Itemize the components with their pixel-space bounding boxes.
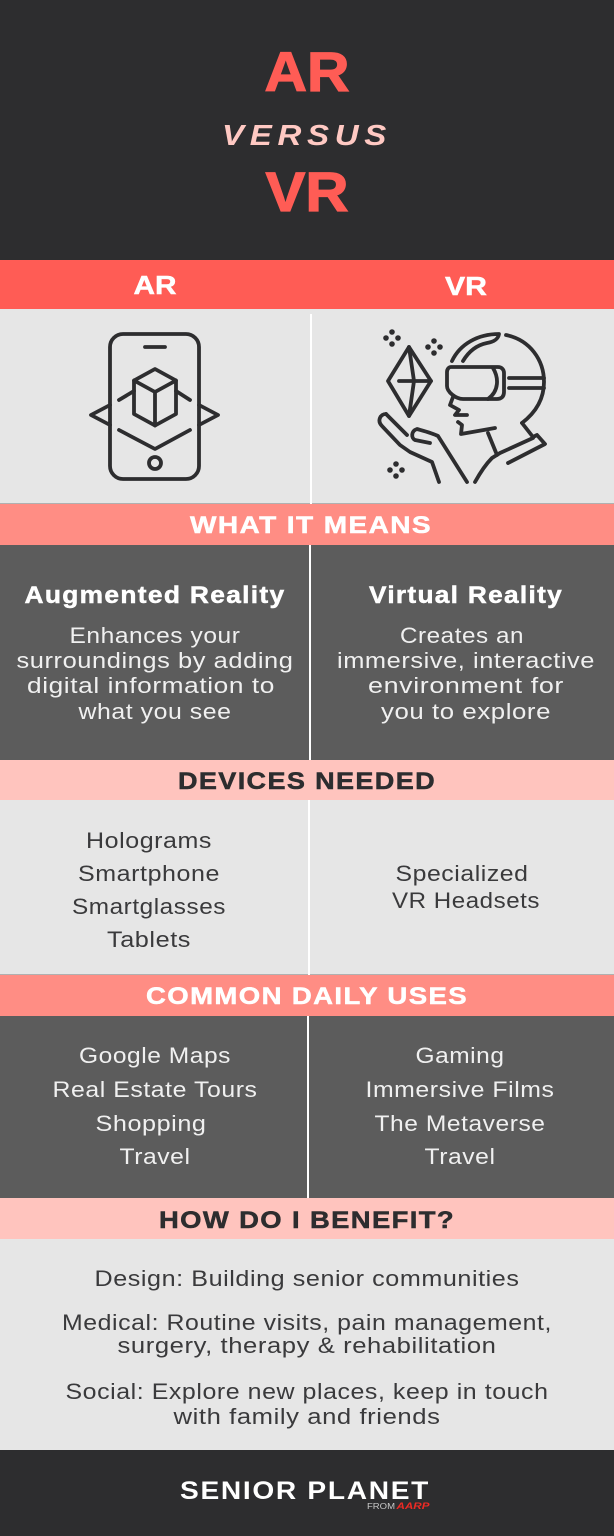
text block: benefits list: with family and friends xyxy=(172,1404,441,1429)
title: AR xyxy=(264,40,350,103)
text block: AR devices: Tablets xyxy=(107,927,191,952)
title: VERSUS xyxy=(222,120,392,152)
heading: devices needed: DEVICES NEEDED xyxy=(178,768,436,795)
text block: benefits list: Medical: Routine visits, pain management, xyxy=(62,1310,552,1335)
text block: augmented reality: Augmented Reality xyxy=(24,582,286,609)
panel: column headers xyxy=(0,260,614,309)
text block: AR uses: Travel xyxy=(120,1144,190,1169)
heading: what it means xyxy=(0,504,614,545)
text block: VR devices xyxy=(392,861,540,913)
title xyxy=(222,40,392,223)
text block: AR uses: Shopping xyxy=(96,1111,206,1136)
text block: VR uses: Travel xyxy=(424,1144,496,1169)
text block: AR uses: Real Estate Tours xyxy=(52,1077,258,1102)
text block: AR uses xyxy=(52,1043,258,1169)
text block: VR devices: Specialized xyxy=(396,861,528,886)
logo: Senior Planet from AARP: SENIOR PLANET xyxy=(180,1477,430,1505)
text block: AR devices xyxy=(72,828,226,952)
heading: how do I benefit xyxy=(0,1198,614,1239)
text block: augmented reality: digital information to xyxy=(27,673,275,698)
heading: common daily uses xyxy=(0,975,614,1016)
heading: common daily uses: COMMON DAILY USES xyxy=(146,983,468,1010)
text block: augmented reality: what you see xyxy=(77,699,231,724)
heading: devices needed xyxy=(0,760,614,800)
text block: AR devices: Smartglasses xyxy=(72,894,226,919)
text block: augmented reality: Enhances your xyxy=(70,623,240,648)
text block: augmented reality: surroundings by adding xyxy=(16,648,294,673)
heading: how do I benefit: HOW DO I BENEFIT? xyxy=(159,1207,455,1234)
panel: column headers: AR xyxy=(134,270,177,300)
text block: VR uses xyxy=(366,1043,554,1169)
text block: virtual reality: Virtual Reality xyxy=(369,582,563,609)
panel: column headers: VR xyxy=(445,271,487,301)
text block: virtual reality: you to explore xyxy=(381,699,551,724)
panel: benefits xyxy=(0,1239,614,1450)
text block: benefits list: surgery, therapy & rehabilitation xyxy=(118,1333,496,1358)
text block: AR devices: Smartphone xyxy=(78,861,220,886)
icon: VR headset user xyxy=(379,334,545,482)
text block: VR uses: Immersive Films xyxy=(366,1077,554,1102)
panel: devices xyxy=(0,800,614,975)
title: VR xyxy=(266,160,348,223)
text block: benefits list xyxy=(62,1266,552,1429)
text block: virtual reality xyxy=(337,582,595,724)
text block: AR devices: Holograms xyxy=(86,828,212,853)
text block: VR uses: The Metaverse xyxy=(374,1111,546,1136)
text block: virtual reality: environment for xyxy=(368,673,564,698)
text block: AR uses: Google Maps xyxy=(79,1043,231,1068)
icon: AR smartphone with cube xyxy=(91,334,218,479)
text block: VR devices: VR Headsets xyxy=(392,888,540,913)
panel: icons xyxy=(0,309,614,504)
panel: uses xyxy=(0,1016,614,1198)
text block: benefits list: Social: Explore new places, keep in touch xyxy=(66,1379,548,1404)
text block: virtual reality: Creates an xyxy=(400,623,524,648)
text block: virtual reality: immersive, interactive xyxy=(337,648,595,673)
text block: augmented reality xyxy=(16,582,294,724)
text block: VR uses: Gaming xyxy=(416,1043,504,1068)
logo: Senior Planet from AARP: FROM xyxy=(367,1501,395,1511)
heading: what it means: WHAT IT MEANS xyxy=(190,512,432,539)
logo: Senior Planet from AARP: AARP xyxy=(395,1501,431,1511)
text block: benefits list: Design: Building senior communities xyxy=(94,1266,520,1291)
panel: definitions xyxy=(0,545,614,760)
